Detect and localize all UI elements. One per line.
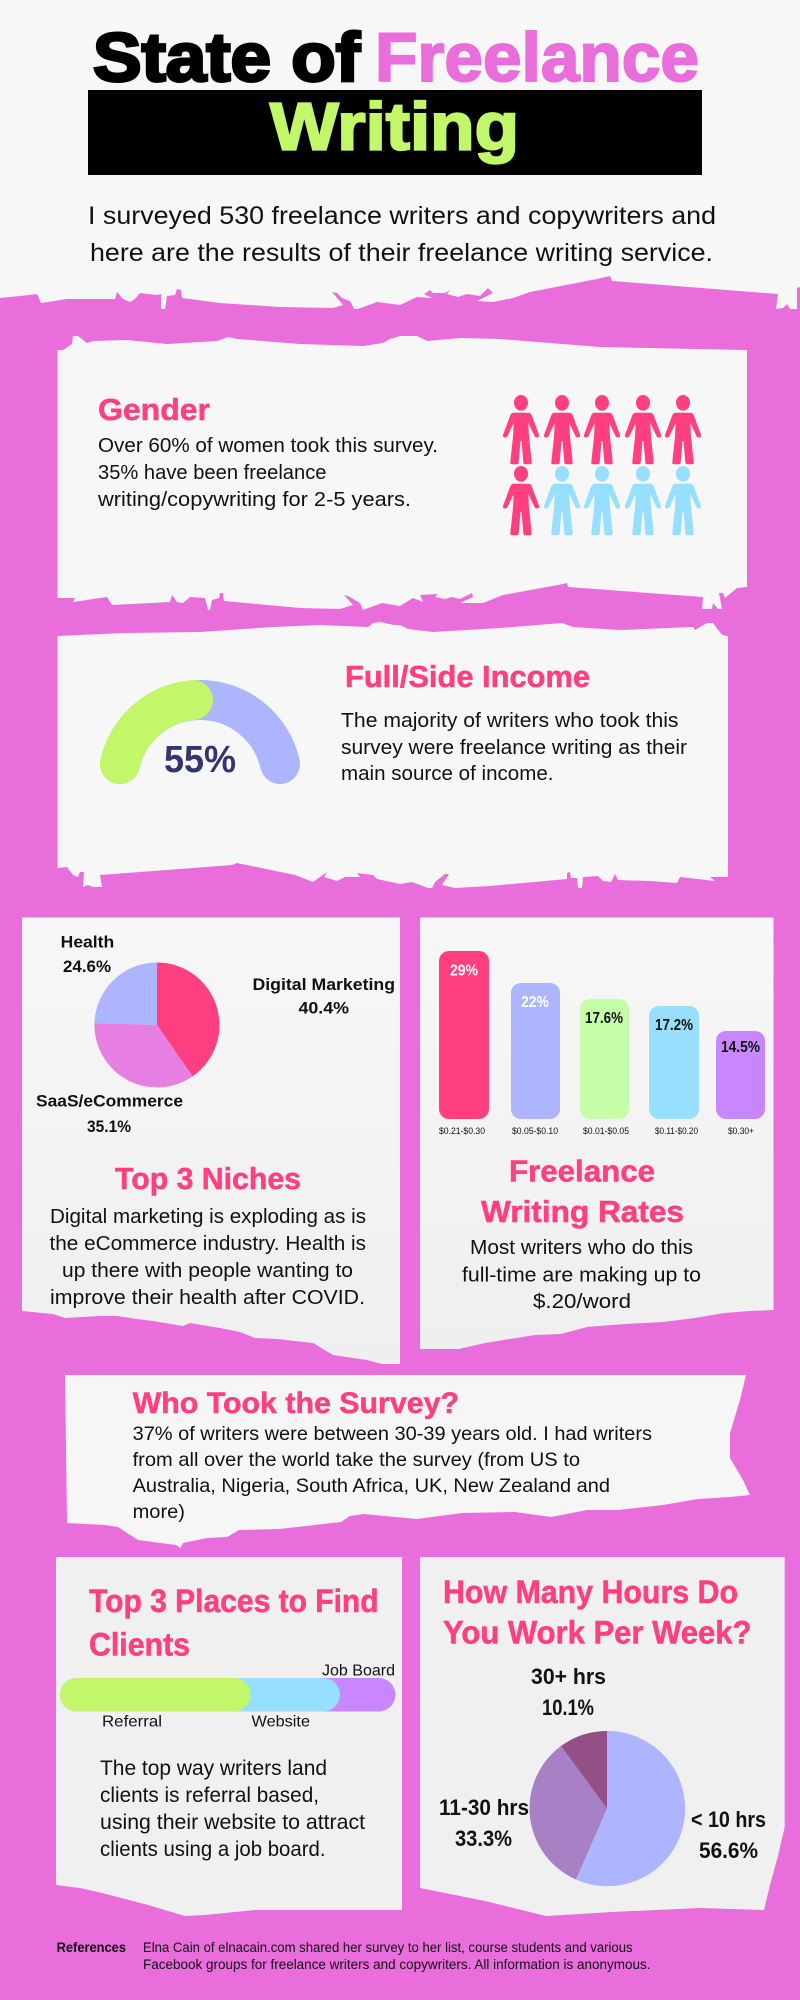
references: Facebook groups for freelance writers and copywriters. All information is anonymous. — [143, 1957, 650, 1972]
text: rates: full-time are making up to — [462, 1264, 701, 1286]
heading: freelance writing rates: Freelance — [509, 1154, 655, 1189]
text: income — [341, 710, 687, 785]
text: gender: Over 60% of women took this survey. — [98, 435, 438, 457]
chart: rates bars: 22% — [521, 994, 549, 1011]
text: rates: Most writers who do this — [470, 1237, 693, 1259]
chart: hours pie: 56.6% — [699, 1838, 758, 1863]
text: places: The top way writers land — [100, 1757, 327, 1780]
chart: niches pie — [36, 932, 395, 1136]
title — [88, 19, 702, 175]
heading: hours: How Many Hours Do — [443, 1574, 738, 1610]
chart: hours pie: 11-30 hrs — [439, 1795, 529, 1820]
text: places: clients is referral based, — [100, 1784, 319, 1807]
chart: niches pie: 40.4% — [298, 998, 349, 1018]
intro text: I surveyed 530 freelance writers and copywriters and — [88, 202, 716, 230]
panel: hours per week — [420, 1557, 785, 1916]
panel: who took the survey — [65, 1375, 750, 1548]
text: niches: improve their health after COVID. — [50, 1287, 365, 1309]
chart: niches pie: Health — [61, 932, 114, 952]
chart: gauge 55% — [120, 700, 280, 781]
references — [57, 1940, 651, 1972]
text: rates — [462, 1237, 701, 1313]
text: places: clients using a job board. — [100, 1838, 326, 1861]
chart: rates bars: $0.01-$0.05 — [583, 1126, 629, 1137]
text: niches: up there with people wanting to — [62, 1260, 353, 1282]
heading: places: Clients — [89, 1626, 190, 1662]
chart: niches pie: 35.1% — [87, 1117, 131, 1136]
text: gender — [97, 435, 438, 511]
text: places — [100, 1757, 365, 1861]
chart: rates bars: $0.11-$0.20 — [655, 1126, 698, 1137]
text: survey: Australia, Nigeria, South Africa, UK, New Zealand and — [133, 1475, 610, 1497]
references: Elna Cain of elnacain.com shared her survey to her list, course students and various — [143, 1940, 633, 1955]
chart: niches pie: 24.6% — [63, 957, 111, 976]
text: rates: $.20/word — [533, 1291, 631, 1313]
chart: niches pie: Digital Marketing — [252, 975, 395, 994]
chart: hours pie: < 10 hrs — [691, 1807, 766, 1832]
text: income: survey were freelance writing as their — [341, 737, 687, 759]
text: gender: 35% have been freelance — [98, 462, 326, 484]
text: niches: Digital marketing is exploding as is — [50, 1206, 366, 1228]
heading: freelance writing rates: Writing Rates — [481, 1194, 684, 1229]
heading: who took the survey: Who Took the Survey? — [133, 1387, 459, 1420]
chart: rates bars — [439, 951, 765, 1137]
text: niches: the eCommerce industry. Health is — [50, 1233, 366, 1255]
text: survey: more) — [133, 1501, 185, 1523]
text: income: The majority of writers who took this — [341, 710, 678, 732]
heading: gender: Gender — [98, 392, 210, 427]
panel: top 3 niches — [22, 918, 400, 1364]
chart: rates bars: $0.30+ — [728, 1126, 754, 1137]
chart: rates bars: $0.21-$0.30 — [439, 1126, 485, 1137]
chart: hours pie — [439, 1664, 766, 1886]
chart: rates bars: $0.05-$0.10 — [512, 1126, 558, 1137]
chart: stacked bar: Job Board — [322, 1662, 395, 1680]
icon: people pictogram — [503, 395, 701, 535]
chart: gauge 55%: 55% — [164, 739, 236, 781]
chart: rates bars: 17.2% — [655, 1017, 693, 1034]
heading: freelance writing rates — [481, 1154, 684, 1229]
heading: places: Top 3 Places to Find — [89, 1583, 379, 1619]
chart: niches pie: SaaS/eCommerce — [36, 1092, 183, 1110]
text: places: using their website to attract — [100, 1811, 365, 1834]
title line one — [93, 19, 699, 96]
chart: stacked bar — [60, 1662, 395, 1730]
chart: rates bars: 29% — [450, 963, 478, 980]
panel: freelance writing rates — [420, 918, 774, 1349]
chart: hours pie: 30+ hrs — [531, 1664, 606, 1689]
title banner: Writing — [270, 90, 519, 164]
chart: hours pie: 10.1% — [542, 1695, 594, 1720]
text: survey — [133, 1423, 652, 1523]
text: survey: 37% of writers were between 30-39 years old. I had writers — [133, 1423, 652, 1445]
panel: gender — [58, 336, 747, 610]
chart: rates bars: 14.5% — [721, 1039, 760, 1056]
chart: hours pie: 33.3% — [455, 1826, 512, 1851]
chart: stacked bar: Referral — [102, 1714, 162, 1730]
text: gender: writing/copywriting for 2-5 years. — [97, 489, 411, 511]
references: References — [57, 1940, 126, 1955]
intro text: here are the results of their freelance writing service. — [90, 239, 713, 267]
heading: hours: You Work Per Week? — [443, 1614, 752, 1650]
heading: places — [89, 1583, 379, 1662]
text: income: main source of income. — [341, 763, 554, 785]
title banner — [88, 90, 702, 175]
chart: stacked bar: Website — [252, 1714, 310, 1730]
panel: top 3 places to find clients — [56, 1557, 402, 1916]
title line one: Freelance — [375, 19, 699, 96]
text: niches — [50, 1206, 366, 1309]
heading: income: Full/Side Income — [345, 659, 590, 694]
intro text — [88, 202, 716, 267]
chart: rates bars: 17.6% — [585, 1010, 623, 1027]
panel: full/side income — [58, 622, 728, 888]
title line one: State of — [93, 19, 361, 96]
text: survey: from all over the world take the survey (from US to — [133, 1449, 580, 1471]
heading: hours — [443, 1574, 752, 1650]
heading: top 3 niches: Top 3 Niches — [115, 1161, 301, 1196]
